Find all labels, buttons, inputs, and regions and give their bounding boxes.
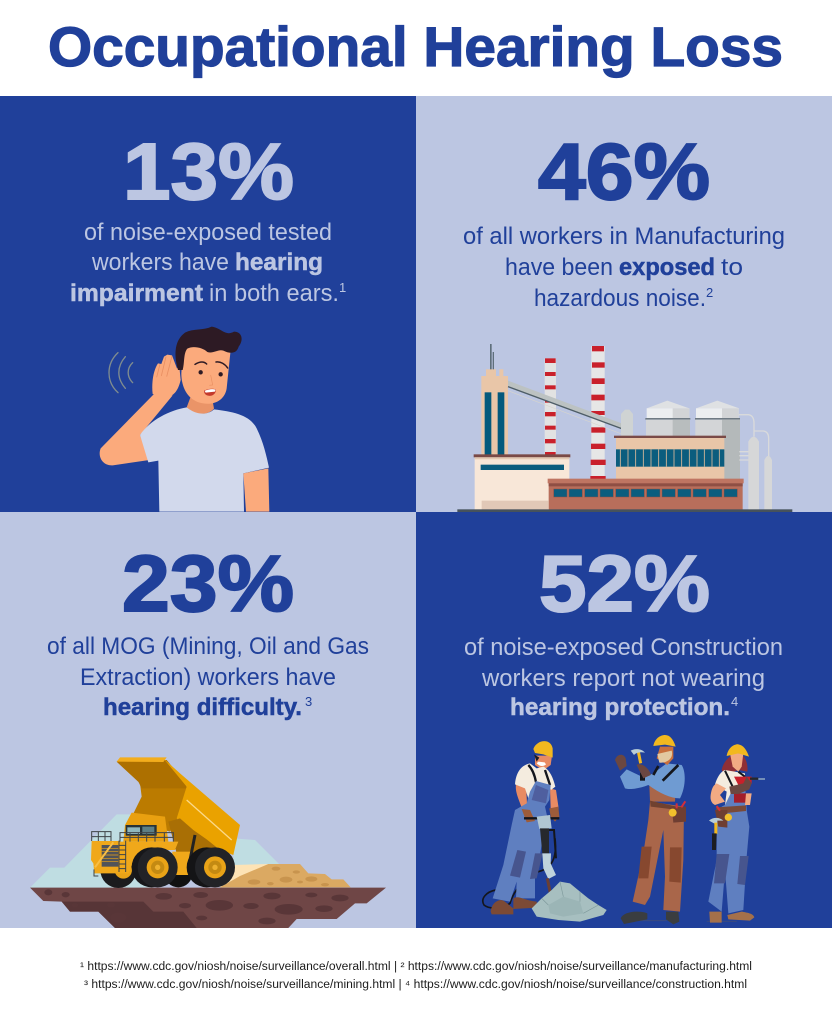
text block: construction: of noise-exposed Construction <box>464 634 783 661</box>
text block: construction: hearing protection. <box>510 694 730 721</box>
panel: hearing impairment <box>0 96 416 512</box>
text block: hearing impairment: workers have <box>91 249 229 276</box>
statistic: 52%: 52% <box>539 539 710 628</box>
footnote sources <box>80 961 752 991</box>
text block: hearing impairment: of noise-exposed tested <box>84 219 332 246</box>
text block: mining: of all MOG (Mining, Oil and Gas <box>47 633 369 660</box>
text block: hearing impairment: hearing <box>235 249 323 276</box>
footnote sources: ³ https://www.cdc.gov/niosh/noise/surveillance/mining.html | ⁴ https://www.cdc.gov/niosh/noise/surveillance/construction.html <box>84 979 747 991</box>
text block: manufacturing: exposed <box>619 254 715 281</box>
text block: manufacturing: hazardous noise. <box>534 285 706 312</box>
icon: mining dump truck <box>30 757 386 928</box>
text block: hearing impairment: in both ears. <box>209 280 339 307</box>
text block: hearing impairment: 1 <box>339 280 346 295</box>
text block: mining <box>47 633 369 721</box>
panel: mining hearing difficulty <box>0 512 416 928</box>
title: Occupational Hearing Loss <box>48 15 783 78</box>
icon: man cupping ear <box>100 327 269 512</box>
text block: hearing impairment <box>70 219 346 307</box>
statistic: 46%: 46% <box>538 127 710 216</box>
panel: manufacturing noise exposure <box>416 96 832 512</box>
icon: construction workers <box>483 735 765 924</box>
worker with jackhammer <box>483 741 607 922</box>
text block: manufacturing: of all workers in Manufacturing <box>463 223 785 250</box>
text block: mining: 3 <box>305 694 312 709</box>
text block: construction: workers report not wearing <box>481 665 765 692</box>
text block: mining: hearing difficulty. <box>103 694 302 721</box>
statistic: 13%: 13% <box>123 127 294 216</box>
text block: construction: 4 <box>731 694 738 709</box>
text block: mining: Extraction) workers have <box>80 664 336 691</box>
text block: hearing impairment: impairment <box>70 280 203 307</box>
text block: manufacturing: 2 <box>706 285 713 300</box>
workers with hammer and drill <box>615 735 765 924</box>
statistic: 23%: 23% <box>122 539 294 628</box>
icon: factory <box>457 344 792 512</box>
text block: construction <box>464 634 783 721</box>
text block: manufacturing <box>463 223 785 312</box>
text block: manufacturing: to <box>721 254 743 281</box>
panel: construction hearing protection <box>416 512 832 928</box>
footnote sources: ¹ https://www.cdc.gov/niosh/noise/surveillance/overall.html | ² https://www.cdc.gov/niosh/noise/surveillance/manufacturing.html <box>80 961 752 973</box>
text block: manufacturing: have been <box>505 254 613 281</box>
